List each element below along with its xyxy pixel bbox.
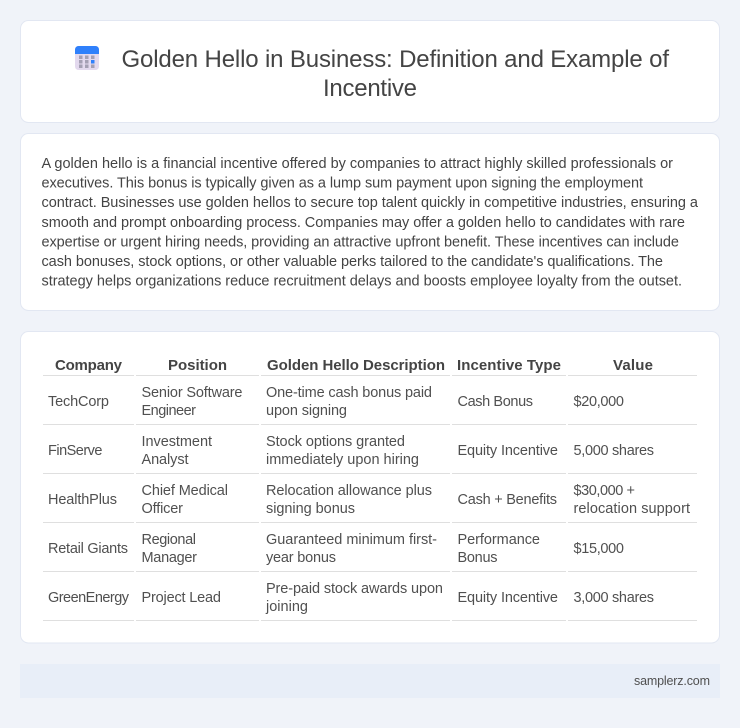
- icon: calendar: [75, 46, 99, 70]
- table row: TechCorp: Engineer: [142, 403, 196, 419]
- table header row: Company: [55, 357, 123, 374]
- title text: [122, 46, 669, 102]
- table row: FinServe: Analyst: [142, 452, 188, 468]
- table row: HealthPlus: Officer: [142, 501, 183, 517]
- table row: GreenEnergy: Equity Incentive: [458, 590, 558, 606]
- table row: HealthPlus: [48, 483, 690, 517]
- panel: definition paragraph: [20, 134, 720, 310]
- paragraph text: A golden hello is a financial incentive offered by companies to attract highly skilled professionals or: [42, 156, 673, 172]
- table row: Retail Giants: year bonus: [266, 550, 336, 566]
- table row: GreenEnergy: joining: [265, 599, 308, 615]
- table row: Retail Giants: [48, 532, 624, 566]
- table row: HealthPlus: relocation support: [574, 501, 690, 517]
- table row: TechCorp: TechCorp: [48, 394, 109, 410]
- paragraph text: strategy helps organizations reduce recruitment delays and boosts employee loyalty from the outset.: [42, 274, 682, 290]
- table row: FinServe: Equity Incentive: [458, 443, 558, 459]
- panel: examples table: [20, 332, 720, 643]
- table row: TechCorp: $20,000: [574, 394, 624, 410]
- table row: GreenEnergy: Project Lead: [142, 590, 221, 606]
- footer source text: samplerz.com: [634, 674, 710, 688]
- paragraph text: expertise or urgent hiring needs, providing an attractive upfront benefit. These incentives can include: [42, 234, 679, 250]
- table row: TechCorp: [48, 385, 624, 419]
- table row: Retail Giants: Regional: [142, 532, 196, 548]
- table row: GreenEnergy: GreenEnergy: [48, 590, 130, 606]
- table row: GreenEnergy: [48, 581, 654, 615]
- table row: TechCorp: One-time cash bonus paid: [266, 385, 432, 401]
- table row: HealthPlus: HealthPlus: [48, 492, 117, 508]
- table header row: Value: [613, 357, 653, 374]
- table row: GreenEnergy: Pre-paid stock awards upon: [266, 581, 443, 597]
- table row: TechCorp: Senior Software: [142, 385, 242, 401]
- footer bar: [20, 664, 720, 698]
- title text: Incentive: [323, 75, 417, 102]
- table row: FinServe: immediately upon hiring: [266, 452, 419, 468]
- table row: HealthPlus: Relocation allowance plus: [266, 483, 432, 499]
- table row: HealthPlus: $30,000 +: [574, 483, 635, 499]
- table row: Retail Giants: $15,000: [574, 541, 624, 557]
- table header row: Position: [168, 357, 227, 374]
- table row: FinServe: FinServe: [48, 443, 102, 459]
- table header row: [55, 357, 653, 374]
- paragraph text: smooth and prompt onboarding process. Companies may offer a golden hello to candidates with rare: [42, 215, 685, 231]
- table row: FinServe: Investment: [142, 434, 212, 450]
- table row: GreenEnergy: 3,000 shares: [574, 590, 654, 606]
- table row: HealthPlus: signing bonus: [266, 501, 355, 517]
- table row: FinServe: Stock options granted: [266, 434, 405, 450]
- table header row: Golden Hello Description: [267, 357, 445, 374]
- paragraph text: executives. This bonus is typically given as a lump sum payment upon signing the employment: [42, 176, 643, 192]
- paragraph text: contract. Businesses use golden hellos to secure top talent quickly in competitive industries, ensuring a: [42, 195, 699, 211]
- table row: FinServe: 5,000 shares: [574, 443, 654, 459]
- panel: title header: [20, 20, 720, 122]
- table row: Retail Giants: Manager: [142, 550, 197, 566]
- table row: Retail Giants: Retail Giants: [48, 541, 128, 557]
- table row: Retail Giants: Bonus: [458, 550, 498, 566]
- title text: Golden Hello in Business: Definition and Example of: [122, 46, 669, 73]
- table row: TechCorp: upon signing: [266, 403, 347, 419]
- table row: Retail Giants: Guaranteed minimum first-: [266, 532, 437, 548]
- paragraph text: [42, 156, 699, 290]
- table row: FinServe: [48, 434, 654, 468]
- table row: HealthPlus: Cash + Benefits: [458, 492, 557, 508]
- table row: HealthPlus: Chief Medical: [142, 483, 228, 499]
- table header row: Incentive Type: [457, 357, 561, 374]
- paragraph text: cash bonuses, stock options, or other valuable perks tailored to the candidate's qualifications. The: [42, 254, 663, 270]
- table row: Retail Giants: Performance: [458, 532, 540, 548]
- table row: TechCorp: Cash Bonus: [458, 394, 533, 410]
